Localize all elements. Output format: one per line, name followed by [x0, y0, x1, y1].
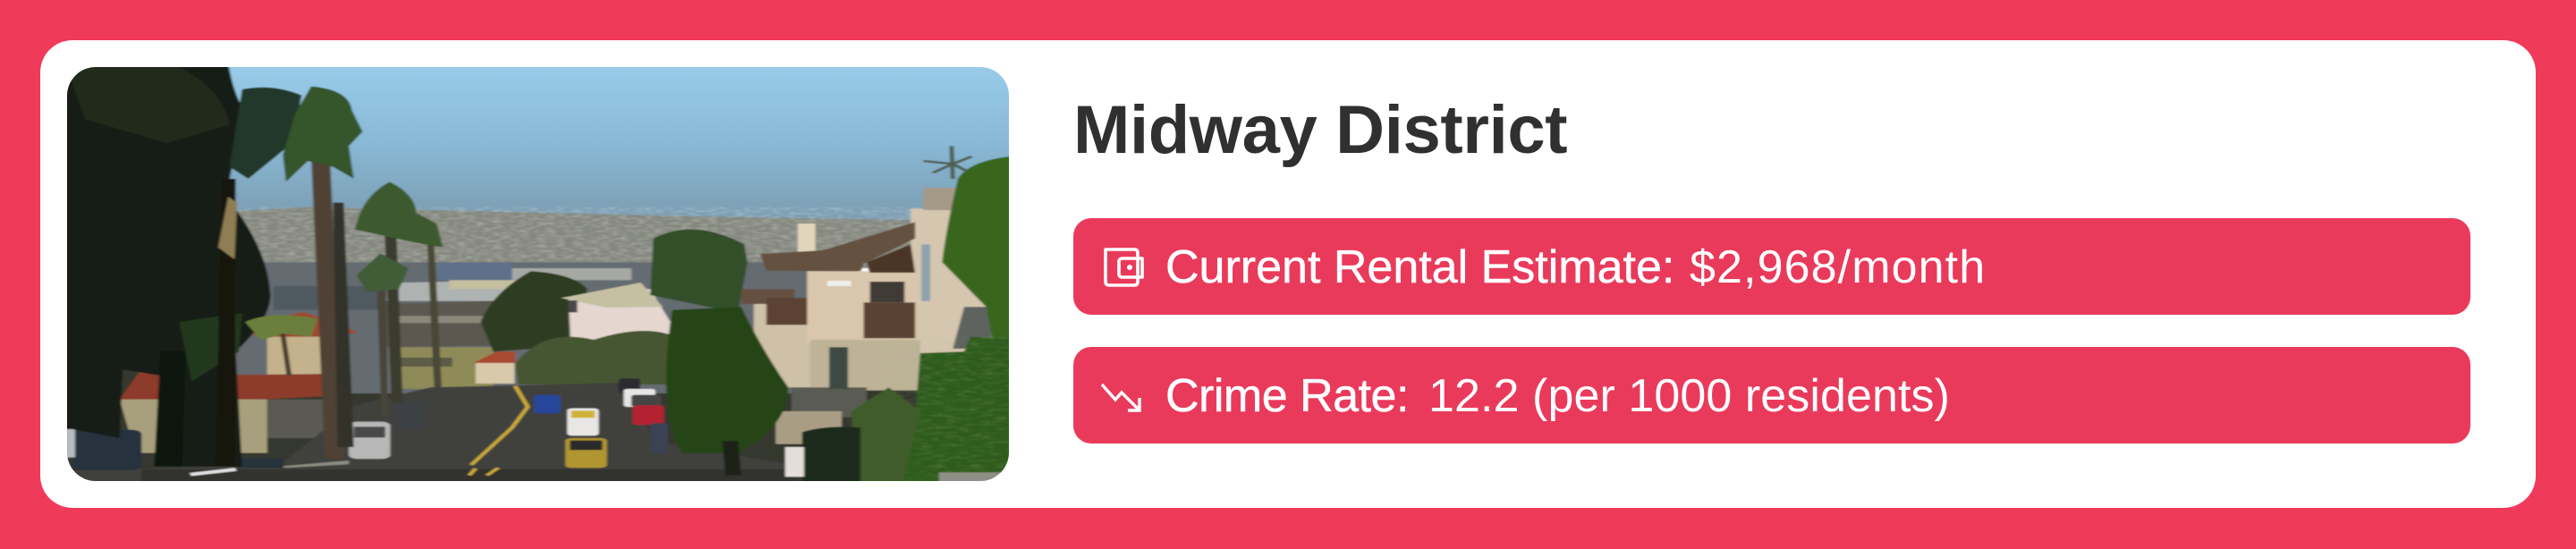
garage roof [953, 307, 992, 349]
road centre lines [470, 386, 528, 476]
crime value: 12.2 (per 1000 residents) [1428, 370, 1950, 422]
photo: hillside street with palm trees [67, 67, 1009, 481]
left house [267, 334, 349, 376]
hedge [883, 337, 1027, 489]
background trees [480, 271, 588, 351]
city hills [230, 207, 933, 268]
right houses [911, 208, 986, 355]
dark trunks [216, 179, 236, 467]
road [66, 383, 794, 483]
cars [66, 378, 668, 470]
third palm [377, 286, 387, 418]
small front palm [245, 315, 318, 340]
tree by house [650, 229, 748, 313]
stat bar: rental estimate [1073, 218, 2470, 315]
sky [41, 63, 1027, 222]
small right palm [923, 146, 971, 179]
tall palm trunk [311, 155, 343, 459]
dark shrub [802, 427, 860, 489]
tall palm crown [283, 87, 362, 182]
street tree [666, 307, 788, 453]
airport and harbor [230, 262, 858, 393]
white apartment [569, 289, 672, 378]
left dark trees [41, 63, 270, 467]
crime label: Crime Rate: [1165, 370, 1409, 422]
rental label: Current Rental Estimate: [1165, 241, 1674, 293]
title: Midway District [1073, 92, 1567, 168]
second palm [385, 232, 402, 402]
icon: trending down [1100, 383, 1141, 412]
front shrub [852, 387, 920, 489]
icon: wallet [1104, 248, 1144, 287]
right foliage [942, 155, 1027, 340]
base ground [41, 351, 1027, 489]
distant buildings [396, 347, 493, 389]
rental value: $2,968/month [1690, 241, 1986, 293]
stat bar: crime rate [1073, 347, 2470, 443]
midground shrubs [515, 331, 682, 384]
